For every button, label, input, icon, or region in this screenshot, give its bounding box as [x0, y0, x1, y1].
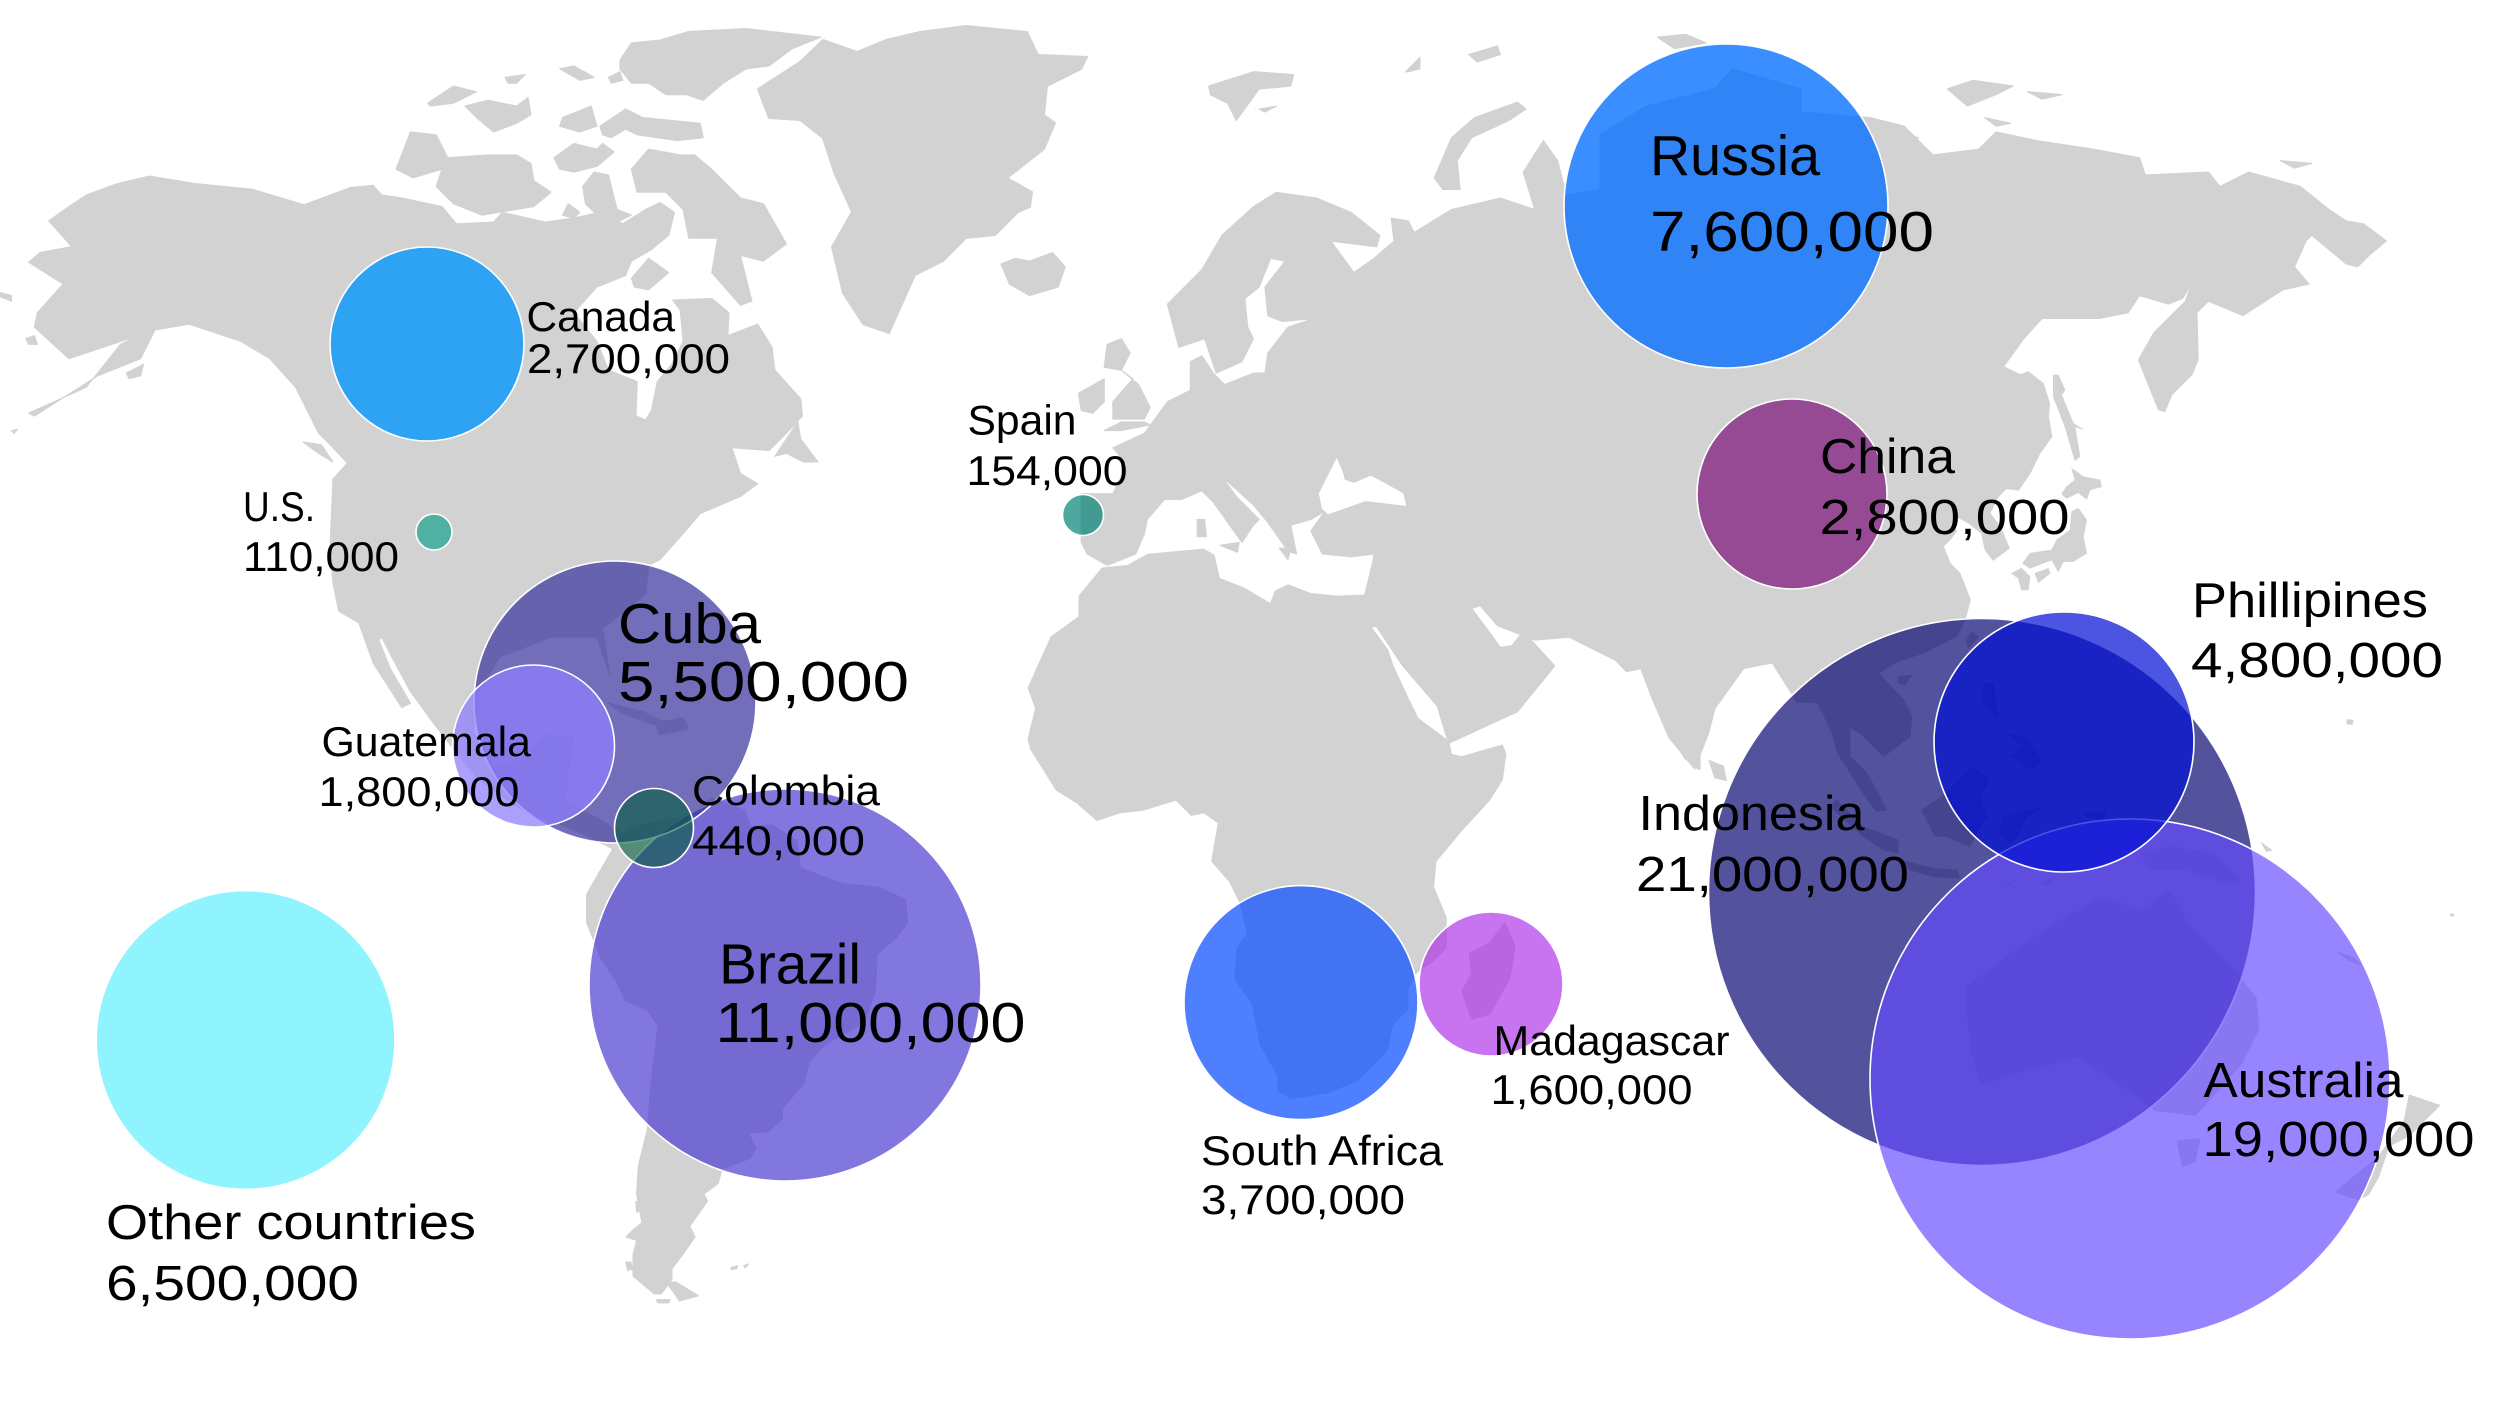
bubble: South Africa	[1184, 886, 1418, 1120]
label: U.S.: 110,000	[243, 533, 399, 580]
bubble: Indonesia	[1708, 618, 2256, 1166]
bubble: Russia	[1564, 44, 1888, 368]
bubble: Phillipines	[1934, 612, 2194, 872]
label: Madagascar: Madagascar	[1494, 1017, 1730, 1064]
bubble: Spain	[1062, 494, 1104, 536]
label: Cuba: 5,500,000	[618, 650, 909, 714]
label: U.S.	[243, 483, 399, 580]
label: Other countries: Other countries	[106, 1196, 476, 1250]
label: Canada: 2,700,000	[527, 335, 730, 382]
label: Cuba	[618, 592, 909, 714]
japan and sakhalin	[2012, 375, 2102, 590]
label: South Africa: South Africa	[1201, 1127, 1444, 1174]
label: Brazil: Brazil	[719, 932, 861, 996]
bubble: China	[1697, 399, 1887, 589]
label: Colombia	[692, 767, 881, 864]
label: Guatemala: Guatemala	[322, 718, 532, 765]
label: Madagascar: 1,600,000	[1490, 1066, 1692, 1113]
bubble: Canada	[330, 247, 524, 441]
label: Other countries: 6,500,000	[106, 1257, 359, 1311]
label: Indonesia: 21,000,000	[1636, 848, 1909, 902]
label: Russia: 7,600,000	[1650, 200, 1934, 264]
label: China: China	[1820, 430, 1956, 484]
bubble: Cuba	[474, 561, 756, 843]
label: Indonesia	[1636, 787, 1909, 902]
label: China: 2,800,000	[1820, 491, 2070, 545]
label: Spain: Spain	[968, 396, 1076, 444]
label: Brazil	[716, 932, 1026, 1055]
label: Madagascar	[1490, 1017, 1730, 1113]
label: Australia: 19,000,000	[2202, 1113, 2474, 1167]
label: Phillipines	[2191, 574, 2443, 688]
label: Cuba: Cuba	[618, 592, 761, 656]
label: Guatemala: 1,800,000	[318, 768, 520, 815]
label: Spain: 154,000	[966, 447, 1128, 494]
bubble: Colombia	[614, 788, 694, 868]
label: Australia	[2202, 1054, 2474, 1167]
label: South Africa: 3,700,000	[1201, 1176, 1405, 1223]
bubble: Other countries	[97, 891, 394, 1189]
label: Colombia: Colombia	[692, 767, 881, 814]
maritime southeast asia	[1830, 632, 2240, 887]
label: Spain	[966, 396, 1128, 494]
north america	[0, 29, 821, 852]
label: Canada: Canada	[526, 293, 676, 340]
label: Phillipines: Phillipines	[2192, 574, 2428, 628]
label: South Africa	[1201, 1127, 1444, 1223]
bubble: U.S.	[416, 514, 452, 550]
label: Other countries	[106, 1196, 476, 1311]
bubble: Brazil	[589, 789, 981, 1181]
label: Brazil: 11,000,000	[716, 991, 1026, 1055]
bubble: Madagascar	[1419, 912, 1563, 1056]
label: U.S.: U.S.	[243, 483, 315, 530]
south america	[586, 798, 908, 1303]
label: Guatemala	[318, 718, 532, 815]
africa	[1028, 549, 1515, 1098]
east asia	[1600, 34, 2386, 812]
bubble: Australia	[1870, 819, 2390, 1339]
europe, west asia	[1001, 46, 1700, 769]
label: Indonesia: Indonesia	[1638, 787, 1865, 841]
label: Russia: Russia	[1650, 124, 1820, 188]
label: Canada	[526, 293, 730, 382]
label: Australia: Australia	[2204, 1054, 2404, 1108]
label: China	[1820, 430, 2070, 545]
oceania	[1966, 720, 2454, 1200]
label: Russia	[1650, 124, 1934, 264]
label: Phillipines: 4,800,000	[2191, 634, 2443, 688]
greenland	[758, 26, 1087, 333]
bubble: Guatemala	[452, 665, 614, 827]
label: Colombia: 440,000	[692, 817, 865, 864]
